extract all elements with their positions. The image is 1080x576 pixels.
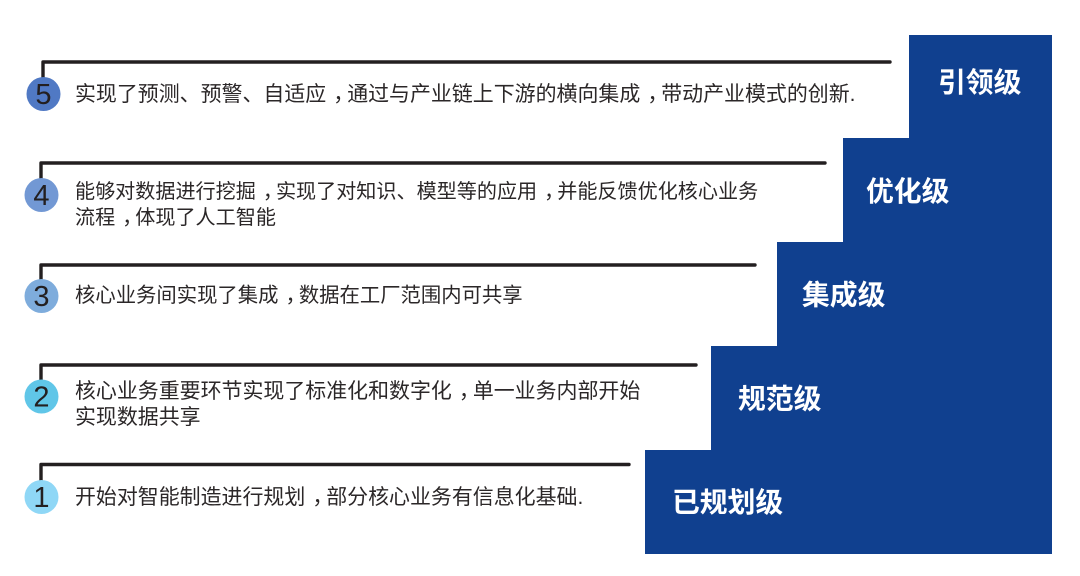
item 3 [24,265,755,313]
step: level 3 [777,242,1052,347]
connector line 3 [41,265,755,282]
step: level 5 [909,35,1052,139]
label: 集成级: 集成级 [802,280,886,310]
number badge 2: 2 [33,382,50,414]
text 2 [75,380,640,429]
connector line 1 [41,464,629,482]
number badge 1: 1 [33,482,50,514]
label: 规范级: 规范级 [738,384,822,414]
text 1: 开始对智能制造进行规划 ，部分核心业务有信息化基础. [75,486,583,509]
label: 优化级: 优化级 [866,176,950,207]
text 4: 流程 ，体现了人工智能 [75,206,276,229]
label: 引领级: 引领级 [938,67,1022,98]
number badge 4 [24,178,58,212]
number badge 5 [26,77,60,111]
number badge 4: 4 [33,180,50,212]
connector line 4 [41,163,825,181]
step: level 1 [645,450,1052,554]
label: 已规划级: 已规划级 [672,487,783,518]
text 5: 实现了预测、预警、自适应 ，通过与产业链上下游的横向集成 ，带动产业模式的创新. [75,83,856,106]
step: level 2 [711,346,1052,451]
text 4 [75,180,758,229]
item 2 [24,365,696,429]
item 1 [24,464,629,514]
number badge 2 [24,380,58,414]
text 2: 实现数据共享 [75,406,201,429]
connector line 5 [43,62,890,80]
connector line 2 [41,365,696,382]
item 4 [24,163,825,229]
text 4: 能够对数据进行挖掘 ，实现了对知识、模型等的应用 ，并能反馈优化核心业务 [75,180,758,203]
item 5 [26,62,890,111]
staircase [645,35,1052,554]
number badge 3: 3 [33,281,50,313]
text 2: 核心业务重要环节实现了标准化和数字化 ，单一业务内部开始 [75,380,640,403]
step: level 4 [843,138,1052,243]
number badge 3 [24,279,58,313]
number badge 1 [24,480,58,514]
text 3: 核心业务间实现了集成 ，数据在工厂范围内可共享 [75,284,523,307]
number badge 5: 5 [35,79,52,111]
